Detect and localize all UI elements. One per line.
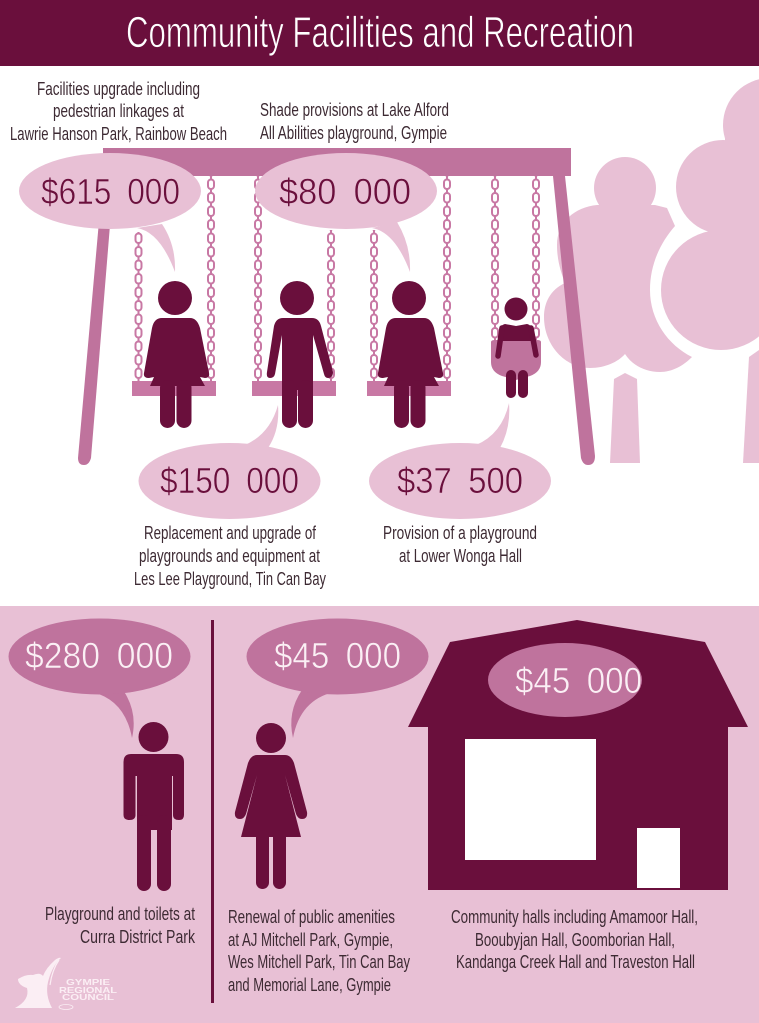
icon: community hall xyxy=(408,620,748,890)
callout: $37 500: $37 500 xyxy=(397,460,523,501)
swing frame xyxy=(78,148,595,465)
text: public amenities xyxy=(228,907,410,995)
icon: woman on swing 2 xyxy=(378,281,443,428)
trees xyxy=(544,78,759,463)
callout: $150 000 xyxy=(138,405,320,519)
text: Les Lee Playground: Replacement and upgrade of xyxy=(144,523,317,543)
text: Curra District Park xyxy=(45,904,196,947)
text: public amenities: Renewal of public amenities xyxy=(228,907,395,927)
logo: Gympie Regional Council: COUNCIL xyxy=(62,992,114,1002)
callout: $80 000 xyxy=(255,153,437,272)
text: Lake Alford xyxy=(260,100,449,143)
icon: child on swing xyxy=(498,298,536,398)
text: Lower Wonga Hall: Provision of a playground xyxy=(383,523,537,543)
text: Lower Wonga Hall xyxy=(383,523,537,566)
callout: $45 000 left: $45 000 xyxy=(274,635,401,676)
logo: Gympie Regional Council xyxy=(15,958,117,1010)
door xyxy=(637,828,680,888)
callout: $150 000: $150 000 xyxy=(160,460,299,501)
logo: Gympie Regional Council: REGIONAL xyxy=(59,985,117,995)
callout: $280 000: $280 000 xyxy=(25,635,173,676)
callout: $280 000 xyxy=(8,618,190,738)
text: Les Lee Playground xyxy=(134,523,326,589)
callout: $45 000 hall: $45 000 xyxy=(515,660,642,701)
text: Curra District Park: Curra District Park xyxy=(80,927,196,947)
text: Lawrie Hanson Park: Facilities upgrade including xyxy=(37,79,200,99)
left tree xyxy=(544,157,692,463)
icon: man xyxy=(124,722,184,891)
swing chains xyxy=(134,176,540,382)
text: Lawrie Hanson Park: Lawrie Hanson Park, Rainbow Beach xyxy=(10,124,227,144)
text: Curra District Park: Playground and toilets at xyxy=(45,904,195,924)
right tree xyxy=(661,78,759,463)
callout: $615 000 xyxy=(19,153,201,272)
callout: $37 500 xyxy=(369,403,551,519)
text: Lower Wonga Hall: at Lower Wonga Hall xyxy=(399,546,522,566)
callout: $45 000 hall xyxy=(488,643,642,717)
icon: woman on swing 1 xyxy=(144,281,209,428)
text: Lawrie Hanson Park xyxy=(10,79,227,144)
text: Lake Alford: All Abilities playground, Gympie xyxy=(260,123,447,143)
icon: woman xyxy=(235,723,307,889)
text: public amenities: at AJ Mitchell Park, Gympie, xyxy=(228,930,393,950)
text: Lake Alford: Shade provisions at Lake Alford xyxy=(260,100,449,120)
callout: $45 000 left xyxy=(246,618,428,738)
callout: $80 000: $80 000 xyxy=(279,171,411,212)
icon: man on swing xyxy=(267,281,333,428)
callout: $615 000: $615 000 xyxy=(41,171,180,212)
text: Les Lee Playground: playgrounds and equipment at xyxy=(139,546,320,566)
text: public amenities: and Memorial Lane, Gympie xyxy=(228,975,391,995)
text: community halls: Booubyjan Hall, Goomborian Hall, xyxy=(475,930,675,950)
divider xyxy=(211,620,214,1003)
text: Lawrie Hanson Park: pedestrian linkages at xyxy=(53,101,184,121)
text: community halls xyxy=(451,907,698,972)
text: Les Lee Playground: Les Lee Playground, Tin Can Bay xyxy=(134,569,326,589)
window xyxy=(465,739,596,860)
logo: Gympie Regional Council: GYMPIE xyxy=(66,977,110,987)
text: public amenities: Wes Mitchell Park, Tin Can Bay xyxy=(228,952,410,972)
swing seats xyxy=(132,340,541,396)
bottom panel background xyxy=(0,606,759,1023)
title banner xyxy=(0,0,759,66)
